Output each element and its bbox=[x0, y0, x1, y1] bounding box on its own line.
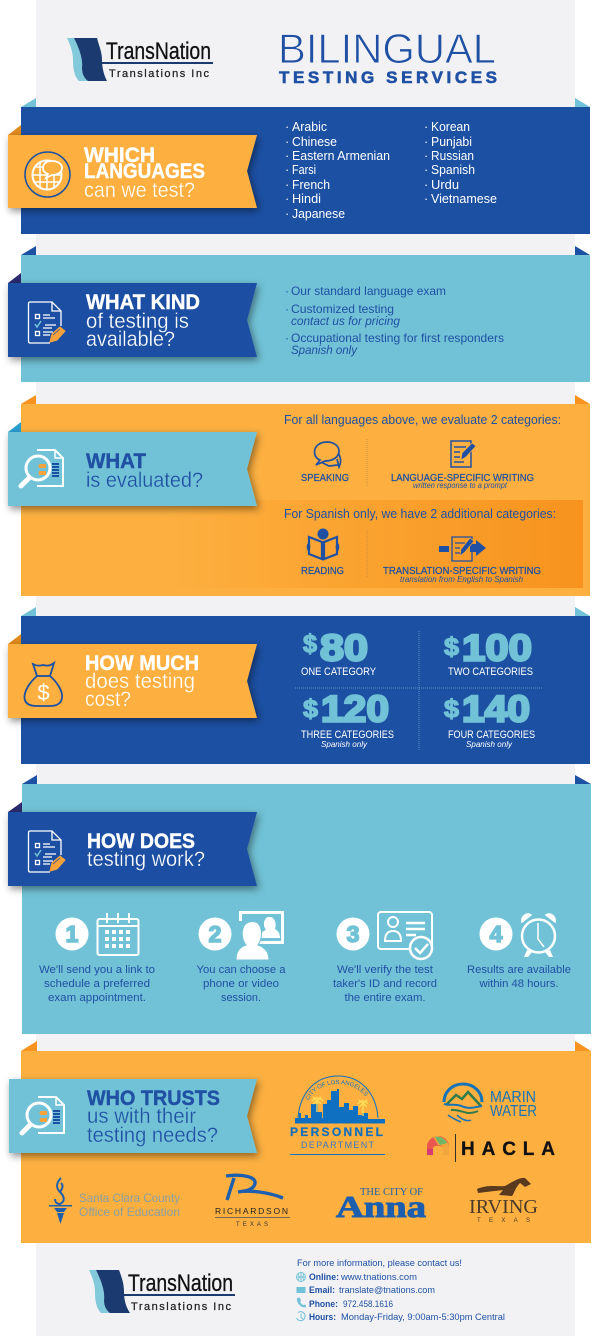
contact details: www.tnations.com bbox=[340, 1272, 417, 1283]
step 4 bbox=[467, 914, 571, 990]
ribbon: how does bbox=[8, 812, 257, 886]
step 4: Results are available bbox=[467, 964, 571, 976]
text: spanish only: For Spanish only, we have 2 additional categories: bbox=[284, 507, 556, 521]
logo: Irving Texas: TEXAS bbox=[477, 1218, 530, 1224]
language list: Arabic bbox=[292, 120, 327, 134]
testing list: Spanish only bbox=[291, 343, 358, 357]
language list: Chinese bbox=[292, 135, 337, 149]
logo: LA personnel department: DEPARTMENT bbox=[301, 1140, 374, 1150]
icon: calendar bbox=[98, 913, 138, 955]
logo: Irving Texas: IRVING bbox=[469, 1196, 538, 1218]
contact details: Hours: bbox=[309, 1312, 336, 1323]
price: three categories: $ bbox=[303, 695, 318, 723]
logo: LA personnel department: CITY OF LOS ANGELES bbox=[306, 1080, 368, 1100]
label: language-specific writing bbox=[391, 472, 534, 490]
heading: HOW DOES bbox=[87, 830, 195, 853]
heading: cost? bbox=[85, 688, 131, 711]
testing list: Occupational testing for first responders bbox=[291, 331, 504, 345]
icon: magnified document bbox=[21, 450, 63, 486]
step 3: We'll verify the test bbox=[337, 964, 433, 976]
panel: which languages bbox=[8, 98, 590, 234]
step 1: We'll send you a link to bbox=[39, 964, 155, 976]
price: four categories: FOUR CATEGORIES bbox=[448, 729, 535, 741]
step 1: exam appointment. bbox=[48, 992, 146, 1004]
language list: Korean bbox=[431, 120, 470, 134]
language list: Farsi bbox=[292, 163, 316, 177]
price: four categories: $ bbox=[444, 695, 459, 723]
step 4: 4 bbox=[490, 921, 503, 947]
step 2: 2 bbox=[209, 921, 221, 947]
step 2: phone or video bbox=[203, 978, 279, 990]
icon: speech bubbles bbox=[314, 442, 341, 467]
price: three categories bbox=[301, 688, 394, 749]
title: TESTING SERVICES bbox=[279, 68, 497, 87]
label: translation-specific writing: TRANSLATION-SPECIFIC WRITING bbox=[383, 565, 541, 577]
step 3 bbox=[333, 912, 437, 1004]
language list: · bbox=[285, 192, 289, 206]
heading bbox=[87, 830, 205, 871]
language list: · bbox=[424, 135, 428, 149]
heading: is evaluated? bbox=[86, 469, 203, 492]
label: speaking: SPEAKING bbox=[301, 472, 349, 484]
logo: Richardson Texas: RICHARDSON bbox=[215, 1206, 288, 1216]
price: two categories: $ bbox=[444, 633, 459, 661]
testing list: Our standard language exam bbox=[291, 284, 446, 298]
price: one category: 80 bbox=[320, 628, 368, 668]
panel: how much bbox=[8, 607, 590, 764]
logo: City of Anna: THE CITY OF bbox=[360, 1187, 423, 1198]
language list: Vietnamese bbox=[431, 192, 497, 206]
panel: how does testing work bbox=[8, 775, 591, 1034]
logo: Richardson Texas bbox=[215, 1175, 290, 1228]
icon: globe bbox=[25, 152, 70, 197]
logo: TransNation: TransNation bbox=[128, 1270, 233, 1297]
language list: · bbox=[285, 207, 289, 221]
testing list bbox=[285, 284, 504, 357]
icon: translation bbox=[439, 537, 486, 561]
language list: · bbox=[285, 163, 289, 177]
price: four categories: 140 bbox=[462, 688, 530, 730]
step 3: 3 bbox=[347, 921, 359, 947]
language list: Japanese bbox=[292, 207, 345, 221]
contact details: Phone: bbox=[309, 1299, 338, 1310]
icon: envelope bbox=[296, 1287, 306, 1293]
ribbon: which languages bbox=[8, 135, 257, 208]
icon: clock bbox=[296, 1312, 305, 1321]
heading: LANGUAGES bbox=[84, 160, 205, 183]
step 3: the entire exam. bbox=[344, 992, 426, 1004]
logo: TransNation bbox=[89, 1270, 235, 1313]
ribbon: what bbox=[8, 432, 257, 506]
logo: Richardson Texas: TEXAS bbox=[236, 1222, 268, 1228]
logo: City of Anna: Anna bbox=[336, 1189, 427, 1224]
heading: testing work? bbox=[87, 848, 205, 871]
icon: money bag: $ bbox=[37, 680, 50, 705]
label: language-specific writing: LANGUAGE-SPECIFIC WRITING bbox=[391, 472, 534, 484]
heading bbox=[86, 450, 203, 492]
language list: French bbox=[292, 178, 330, 192]
heading: does testing bbox=[85, 670, 195, 693]
heading bbox=[86, 291, 200, 351]
title: BILINGUAL bbox=[278, 25, 496, 72]
logo: TransNation: Translations Inc bbox=[131, 1301, 232, 1313]
label: translation-specific writing bbox=[383, 565, 541, 584]
price: three categories: 120 bbox=[321, 688, 389, 730]
price: one category: $ bbox=[303, 630, 317, 658]
icon: phone bbox=[297, 1298, 306, 1307]
logo: TransNation: TransNation bbox=[106, 38, 211, 65]
step 2 bbox=[196, 911, 286, 1004]
heading: us with their bbox=[87, 1105, 196, 1128]
price: one category bbox=[301, 628, 377, 678]
contact details: Online: bbox=[309, 1272, 339, 1283]
contact details: Monday-Friday, 9:00am-5:30pm Central bbox=[341, 1312, 505, 1323]
step 2: session. bbox=[221, 992, 261, 1004]
icon: money bag bbox=[24, 663, 62, 706]
logo: TransNation bbox=[67, 38, 213, 81]
ribbon: who trusts bbox=[9, 1079, 257, 1153]
step 1 bbox=[39, 913, 155, 1004]
language list: Hindi bbox=[292, 192, 321, 206]
language list bbox=[285, 120, 497, 221]
logo: Marin Water: MARIN bbox=[490, 1089, 536, 1106]
language list: Urdu bbox=[431, 178, 459, 192]
price: four categories bbox=[444, 688, 535, 749]
icon: globe bbox=[296, 1272, 306, 1282]
heading: WHAT bbox=[86, 450, 146, 473]
contact details: translate@tnations.com bbox=[339, 1285, 435, 1296]
label: language-specific writing: written response to a prompt bbox=[413, 481, 508, 490]
step 4: within 48 hours. bbox=[478, 978, 558, 990]
language list: · bbox=[424, 192, 428, 206]
logo: LA personnel department: PERSONNEL bbox=[290, 1125, 383, 1139]
icon: checklist bbox=[28, 302, 65, 343]
price: two categories: TWO CATEGORIES bbox=[448, 666, 533, 678]
language list: · bbox=[285, 135, 289, 149]
testing list: contact us for pricing bbox=[291, 314, 400, 328]
language list: Punjabi bbox=[431, 135, 472, 149]
logo: TransNation: Translations Inc bbox=[109, 68, 210, 80]
step 1: schedule a preferred bbox=[44, 978, 150, 990]
icon: writing bbox=[451, 441, 476, 467]
language list: · bbox=[424, 163, 428, 177]
heading bbox=[85, 652, 199, 711]
icon: checklist bbox=[28, 831, 65, 872]
price: four categories: Spanish only bbox=[466, 740, 513, 749]
contact details: Email: bbox=[309, 1285, 335, 1296]
language list: · bbox=[424, 120, 428, 134]
logo: Marin Water bbox=[444, 1084, 537, 1122]
logo: Marin Water: WATER bbox=[490, 1103, 537, 1120]
heading: WHO TRUSTS bbox=[87, 1087, 220, 1110]
heading bbox=[84, 144, 205, 202]
testing list: Customized testing bbox=[291, 302, 394, 316]
testing list: · bbox=[285, 331, 289, 345]
heading: can we test? bbox=[84, 179, 195, 202]
language list: · bbox=[285, 178, 289, 192]
step 2: You can choose a bbox=[196, 964, 286, 976]
logo: Santa Clara County Office of Education: Office of Education bbox=[79, 1205, 180, 1219]
testing list: · bbox=[285, 284, 289, 298]
icon: verified id card bbox=[378, 912, 432, 959]
language list: · bbox=[285, 149, 289, 163]
language list: · bbox=[285, 120, 289, 134]
panel: who trusts bbox=[6, 1041, 591, 1243]
logo: Santa Clara County Office of Education bbox=[49, 1178, 180, 1224]
label: translation-specific writing: translation from English to Spanish bbox=[400, 575, 524, 584]
price: two categories bbox=[444, 628, 533, 678]
header bbox=[67, 25, 497, 87]
contact details: For more information, please contact us! bbox=[297, 1258, 462, 1269]
ribbon: how much bbox=[8, 644, 257, 718]
logo: HACLA: HACLA bbox=[461, 1139, 555, 1160]
heading bbox=[87, 1087, 220, 1147]
heading: WHAT KIND bbox=[86, 291, 200, 314]
testing list: · bbox=[285, 302, 289, 316]
logo: LA personnel department bbox=[290, 1076, 385, 1155]
heading: of testing is bbox=[86, 310, 189, 333]
heading: WHICH bbox=[84, 144, 155, 167]
heading: available? bbox=[86, 328, 175, 351]
language list: Russian bbox=[431, 149, 474, 163]
icon: alarm clock bbox=[522, 914, 555, 957]
panel: what is evaluated bbox=[8, 395, 590, 596]
heading: HOW MUCH bbox=[85, 652, 199, 675]
language list: Eastern Armenian bbox=[292, 149, 390, 163]
panel: what kind of testing bbox=[8, 246, 590, 382]
ribbon: what kind bbox=[8, 283, 257, 357]
language list: Spanish bbox=[431, 163, 475, 177]
icon: reading bbox=[307, 528, 339, 559]
icon: video call bbox=[236, 911, 284, 960]
footer bbox=[89, 1258, 505, 1323]
price: three categories: Spanish only bbox=[321, 740, 368, 749]
logo: Santa Clara County Office of Education: Santa Clara County bbox=[79, 1191, 180, 1205]
step 3: taker's ID and record bbox=[333, 978, 437, 990]
price: two categories: 100 bbox=[462, 628, 532, 668]
price: three categories: THREE CATEGORIES bbox=[301, 729, 394, 741]
text: all languages: For all languages above, we evaluate 2 categories: bbox=[284, 413, 561, 427]
language list: · bbox=[424, 149, 428, 163]
icon: magnified document bbox=[22, 1097, 64, 1133]
logo: Irving Texas bbox=[469, 1178, 538, 1224]
language list: · bbox=[424, 178, 428, 192]
logo: HACLA bbox=[427, 1134, 555, 1162]
heading: testing needs? bbox=[87, 1124, 218, 1147]
step 1: 1 bbox=[66, 921, 79, 947]
contact details: 972.458.1616 bbox=[343, 1299, 393, 1310]
label: reading: READING bbox=[301, 565, 344, 577]
contact details bbox=[296, 1258, 505, 1323]
price: one category: ONE CATEGORY bbox=[301, 666, 377, 678]
